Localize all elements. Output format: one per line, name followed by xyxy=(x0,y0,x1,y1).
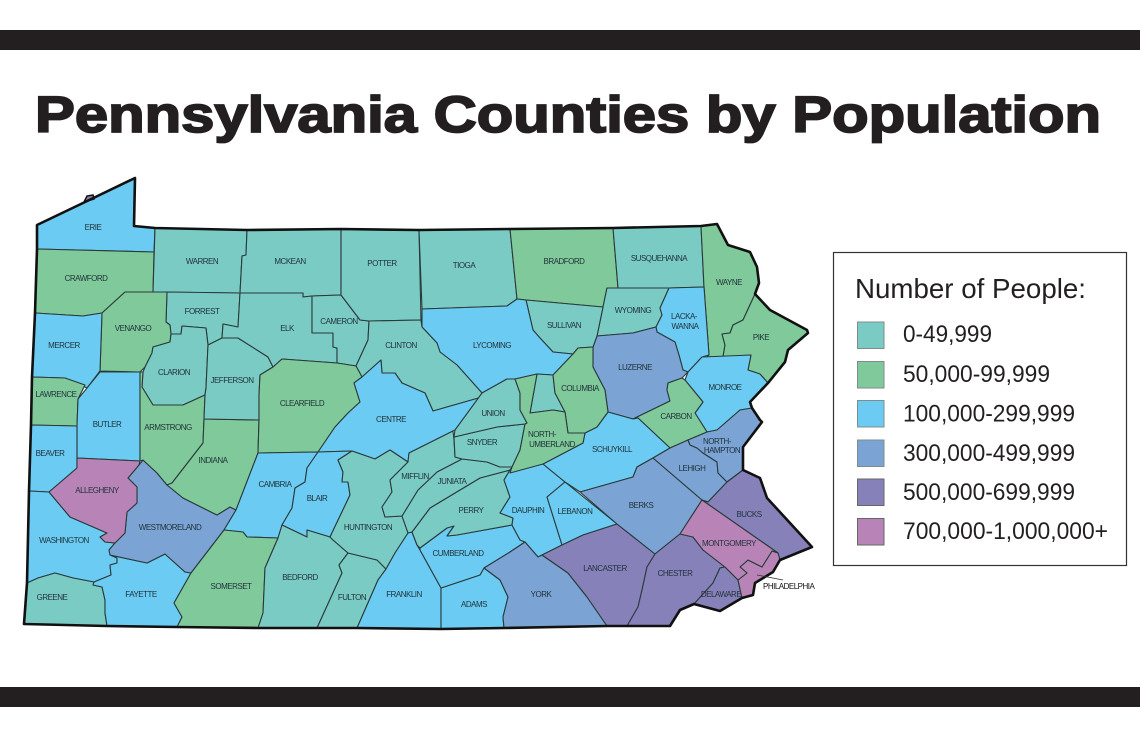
county: Blair xyxy=(282,451,352,537)
county: Northumberland: NORTH- xyxy=(528,430,557,439)
county: Philadelphia xyxy=(738,551,780,598)
county: Cameron: CAMERON xyxy=(320,317,358,326)
county: Schuylkill xyxy=(543,412,670,492)
county: Venango: VENANGO xyxy=(115,324,152,333)
county: Armstrong: ARMSTRONG xyxy=(144,423,192,432)
county: Juniata xyxy=(402,459,512,533)
county: Northumberland: UMBERLAND xyxy=(529,440,576,449)
county: Bedford: BEDFORD xyxy=(282,573,319,582)
county: Lycoming: LYCOMING xyxy=(473,341,511,350)
county: Berks: BERKS xyxy=(629,501,653,510)
county: Wyoming xyxy=(597,288,669,336)
county: Juniata: JUNIATA xyxy=(438,477,467,486)
county: Union xyxy=(454,379,527,437)
county: Allegheny: ALLEGHENY xyxy=(75,486,120,495)
county: Clearfield: CLEARFIELD xyxy=(280,399,325,408)
icon: Presque Isle peninsula xyxy=(84,195,94,202)
county: Huntingdon: HUNTINGTON xyxy=(344,523,393,532)
county: Carbon xyxy=(633,378,707,448)
county: Warren xyxy=(153,228,247,293)
county: Washington xyxy=(27,491,117,583)
county: Warren: WARREN xyxy=(186,257,219,266)
legend panel xyxy=(834,252,1126,566)
county: Armstrong xyxy=(140,372,205,485)
county: Elk xyxy=(222,293,337,367)
county: Venango xyxy=(100,292,171,372)
county: Lycoming xyxy=(422,299,573,393)
county: Greene xyxy=(24,573,107,626)
county: Beaver: BEAVER xyxy=(36,449,65,458)
county: Crawford: CRAWFORD xyxy=(65,274,108,283)
county: Franklin: FRANKLIN xyxy=(386,590,423,599)
county: Cambria: CAMBRIA xyxy=(259,480,293,489)
county: Somerset xyxy=(174,530,278,628)
county: Potter xyxy=(341,229,421,321)
county: Fulton xyxy=(317,553,386,628)
county: Lackawanna xyxy=(656,287,709,372)
county: Bucks xyxy=(702,470,812,560)
county: Monroe: MONROE xyxy=(708,383,742,392)
legend heading: Number of People: xyxy=(855,273,1086,304)
county: Montour xyxy=(530,374,565,413)
legend item: 300,000-499,999: 300,000-499,999 xyxy=(903,440,1075,467)
county: Chester: CHESTER xyxy=(658,569,693,578)
county: Beaver xyxy=(29,425,77,492)
title: Pennsylvania Counties by Population xyxy=(35,86,1101,143)
county: Centre: CENTRE xyxy=(376,415,406,424)
county: Somerset: SOMERSET xyxy=(211,582,252,591)
county: Lebanon xyxy=(547,482,617,545)
county: Schuylkill: SCHUYKILL xyxy=(592,445,633,454)
county: Wayne: WAYNE xyxy=(716,278,742,287)
county: Columbia: COLUMBIA xyxy=(561,384,600,393)
county: McKean xyxy=(240,229,341,297)
county: Cameron xyxy=(312,295,369,366)
county: Adams: ADAMS xyxy=(461,600,487,609)
county: Northumberland xyxy=(510,374,585,473)
county: Indiana: INDIANA xyxy=(199,456,229,465)
county: Fulton: FULTON xyxy=(338,593,367,602)
legend item: 100,000-299,999: 100,000-299,999 xyxy=(903,400,1075,428)
bottom bar xyxy=(0,687,1140,707)
county: Montgomery: MONTGOMERY xyxy=(702,539,757,548)
county: Monroe xyxy=(685,355,768,432)
county: Indiana xyxy=(167,419,259,515)
county: Adams xyxy=(441,568,508,629)
county: Lawrence: LAWRENCE xyxy=(35,390,77,399)
county: Cumberland: CUMBERLAND xyxy=(432,549,484,558)
legend item: 0-49,999 xyxy=(858,321,992,348)
county: Bucks: BUCKS xyxy=(736,510,762,519)
legend item: 0-49,999: 0-49,999 xyxy=(903,321,992,348)
county: Lackawanna: WANNA xyxy=(672,322,700,331)
county: Centre xyxy=(318,360,482,462)
county: Perry: PERRY xyxy=(459,506,485,515)
county: Mercer xyxy=(32,313,102,388)
county: Montgomery xyxy=(680,500,778,580)
county: York xyxy=(484,542,607,628)
county: Lawrence xyxy=(31,377,85,426)
county: Clarion xyxy=(142,326,208,405)
county: Huntingdon xyxy=(330,450,408,569)
county: Delaware: DELAWARE xyxy=(701,590,741,599)
county: York: YORK xyxy=(531,590,552,599)
county: Erie xyxy=(37,178,155,252)
county: Dauphin xyxy=(500,464,565,557)
county: Clarion: CLARION xyxy=(158,368,191,377)
county: Westmoreland xyxy=(109,460,236,573)
county: Fayette: FAYETTE xyxy=(125,590,157,599)
county: Butler: BUTLER xyxy=(93,420,122,429)
county: Cambria xyxy=(224,452,318,538)
county: Lackawanna: LACKA- xyxy=(671,312,698,321)
county: Forest xyxy=(166,292,240,345)
county: Fayette xyxy=(93,554,191,627)
county: Bedford xyxy=(258,525,348,628)
legend item: 700,000-1,000,000+: 700,000-1,000,000+ xyxy=(903,518,1108,545)
county: Susquehanna xyxy=(613,226,704,288)
legend box xyxy=(834,252,1126,566)
county: Forest: FORREST xyxy=(185,307,220,316)
county: Tioga xyxy=(419,229,517,309)
county: Northampton: NORTH- xyxy=(703,437,732,446)
county: Potter: POTTER xyxy=(367,259,397,268)
county: Luzerne: LUZERNE xyxy=(618,363,652,372)
county: Elk: ELK xyxy=(280,324,295,333)
county: Jefferson: JEFFERSON xyxy=(210,376,254,385)
county: Pike: PIKE xyxy=(753,333,769,342)
county: Franklin xyxy=(357,532,441,629)
county: Greene: GREENE xyxy=(37,593,68,602)
county: Clinton: CLINTON xyxy=(385,341,417,350)
county: Wayne xyxy=(701,224,759,357)
Philadelphia leader line xyxy=(757,575,783,580)
county: Chester xyxy=(627,534,725,626)
county: Westmoreland: WESTMORELAND xyxy=(139,523,202,532)
county: Mifflin: MIFFLIN xyxy=(401,472,430,481)
county: Pike xyxy=(722,294,808,383)
county: Snyder xyxy=(454,424,525,467)
county: Butler xyxy=(77,372,140,461)
county: Clearfield xyxy=(258,359,362,453)
Philadelphia label: PHILADELPHIA xyxy=(763,582,816,591)
legend item: 500,000-699,999: 500,000-699,999 xyxy=(903,479,1075,506)
county: Allegheny xyxy=(49,458,140,543)
county: Perry xyxy=(412,470,513,548)
county: Mifflin xyxy=(382,431,462,517)
county: Cumberland xyxy=(420,525,525,588)
county: Sullivan xyxy=(526,300,603,354)
county: Snyder: SNYDER xyxy=(467,438,498,447)
county: Northampton xyxy=(688,408,762,482)
state outline xyxy=(24,178,812,629)
county: Erie: ERIE xyxy=(85,223,102,232)
county: Bradford: BRADFORD xyxy=(544,257,585,266)
county: Mercer: MERCER xyxy=(48,341,81,350)
county: Lancaster: LANCASTER xyxy=(583,564,627,573)
county: Lehigh: LEHIGH xyxy=(679,464,706,473)
county: Crawford xyxy=(35,249,154,316)
county: Bradford xyxy=(510,228,618,307)
legend item: 50,000-99,999: 50,000-99,999 xyxy=(903,361,1050,388)
county: Susquehanna: SUSQUEHANNA xyxy=(631,254,688,263)
county: Berks xyxy=(580,458,702,554)
county: Lehigh xyxy=(653,440,727,502)
county: Lancaster xyxy=(542,524,655,626)
county: Clinton xyxy=(356,320,482,411)
county: Tioga: TIOGA xyxy=(453,261,476,270)
county: Luzerne xyxy=(593,327,688,419)
county: Union: UNION xyxy=(481,409,505,418)
county: Lebanon: LEBANON xyxy=(558,507,593,516)
map of Pennsylvania counties xyxy=(24,178,816,629)
county: Wyoming: WYOMING xyxy=(615,306,652,315)
county: Jefferson xyxy=(204,338,273,420)
top bar xyxy=(0,30,1140,50)
county: Columbia xyxy=(553,347,608,433)
county: Dauphin: DAUPHIN xyxy=(512,506,545,515)
county: Washington: WASHINGTON xyxy=(39,536,90,545)
county: Delaware xyxy=(694,567,742,611)
county: McKean: MCKEAN xyxy=(274,257,306,266)
county: Blair: BLAIR xyxy=(307,494,328,503)
county: Carbon: CARBON xyxy=(660,412,692,421)
county: Sullivan: SULLIVAN xyxy=(547,321,582,330)
county: Northampton: HAMPTON xyxy=(704,446,741,455)
